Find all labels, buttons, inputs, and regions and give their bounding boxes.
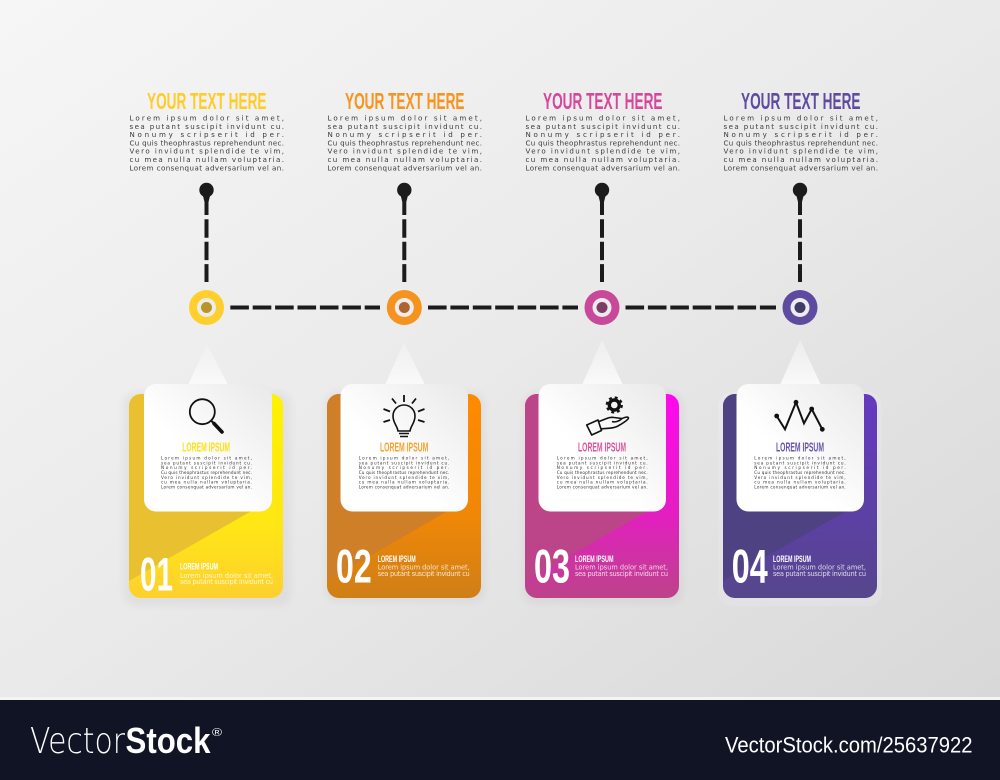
paragraph 4: Nonumy scripserit id per. [724, 130, 878, 139]
footer logo [30, 720, 222, 762]
paragraph 2: Nonumy scripserit id per. [328, 130, 482, 139]
paragraph 3: Vero invidunt splendide te vim, [526, 147, 680, 156]
paragraph 3: Lorem ipsum dolor sit amet, [526, 114, 680, 122]
paragraph 2: Lorem ipsum dolor sit amet, [328, 114, 482, 122]
pin 1 [199, 183, 214, 282]
paragraph 1: Lorem ipsum dolor sit amet, [130, 114, 284, 122]
paragraph 4: cu mea nulla nullam voluptaria. [724, 155, 878, 164]
box text 2: sea putant suscipit invidunt cu. [359, 460, 449, 465]
paragraph 2: sea putant suscipit invidunt cu. [328, 122, 482, 131]
box text 2: cu mea nulla nullam voluptaria. [359, 480, 449, 485]
paragraph 1: sea putant suscipit invidunt cu. [130, 122, 284, 131]
box text 2 [359, 456, 449, 490]
card caption 3 [575, 554, 668, 578]
box text 2: Lorem consenquat adversarium vel an. [359, 485, 449, 490]
box text 4: Lorem consenquat adversarium vel an. [754, 485, 846, 490]
paragraph 1: cu mea nulla nullam voluptaria. [130, 155, 284, 164]
footer logo: ® [212, 727, 222, 739]
paragraph 4: Cu quis theophrastus reprehendunt nec. [724, 138, 878, 147]
box text 4: Nonumy scripserit id per. [754, 465, 846, 470]
paragraph 3 [526, 114, 680, 172]
panel: card 2 [327, 361, 482, 598]
card caption 1: LOREM IPSUM [180, 562, 218, 573]
box text 3: Vero invidunt splendide te vim, [557, 475, 648, 480]
pin 3 [595, 183, 609, 282]
callout pointer 3 [582, 340, 623, 385]
paragraph 2: Cu quis theophrastus reprehendunt nec. [328, 138, 482, 147]
box label 1: LOREM IPSUM [182, 441, 230, 455]
paragraph 3: Cu quis theophrastus reprehendunt nec. [526, 138, 680, 147]
callout pointer 1 [188, 344, 228, 385]
panel: card 4 [718, 340, 882, 606]
box text 4: Vero invidunt splendide te vim, [754, 475, 846, 480]
paragraph 1: Vero invidunt splendide te vim, [130, 147, 284, 156]
heading 4: YOUR TEXT HERE [741, 88, 860, 114]
node 4 [782, 290, 818, 325]
paragraph 4: Lorem consenquat adversarium vel an. [724, 163, 878, 172]
box text 1: Nonumy scripserit id per. [161, 465, 252, 470]
card caption 4: sea putant suscipit invidunt cu [773, 570, 866, 578]
paragraph 3: Lorem consenquat adversarium vel an. [526, 163, 680, 172]
paragraph 1: Lorem consenquat adversarium vel an. [130, 163, 284, 172]
paragraph 4 [724, 114, 878, 172]
box text 1: cu mea nulla nullam voluptaria. [161, 480, 252, 485]
panel: card 1 [126, 368, 288, 602]
paragraph 1 [130, 114, 284, 172]
card caption 2: sea putant suscipit invidunt cu [378, 570, 470, 578]
white box 1 [144, 384, 272, 512]
icon: magnifier [190, 399, 222, 432]
paragraph 4: Lorem ipsum dolor sit amet, [724, 114, 878, 122]
column 1 header [130, 88, 284, 172]
white box 2 [340, 384, 468, 512]
box text 1: Lorem ipsum dolor sit amet, [161, 456, 252, 460]
box text 2: Nonumy scripserit id per. [359, 465, 449, 470]
card caption 4: Lorem ipsum dolor sit amet, [773, 564, 866, 572]
footer bar [0, 697, 1000, 780]
icon: line chart [774, 400, 825, 432]
heading 1: YOUR TEXT HERE [147, 88, 266, 114]
card caption 4 [773, 554, 866, 578]
paragraph 2 [328, 114, 482, 172]
box text 3: Lorem consenquat adversarium vel an. [557, 485, 648, 490]
pin 4 [793, 183, 807, 282]
card caption 2: LOREM IPSUM [378, 554, 416, 565]
box text 1: Lorem consenquat adversarium vel an. [161, 485, 252, 490]
white box 4 [736, 384, 864, 512]
box text 2: Cu quis theophrastus reprehendunt nec. [359, 470, 449, 475]
card caption 1: Lorem ipsum dolor sit amet, [180, 572, 273, 580]
card caption 2: Lorem ipsum dolor sit amet, [378, 564, 470, 572]
box text 2: Vero invidunt splendide te vim, [359, 475, 449, 480]
paragraph 3: Nonumy scripserit id per. [526, 130, 680, 139]
node 3 [584, 290, 620, 325]
box text 3: Lorem ipsum dolor sit amet, [557, 456, 648, 460]
box text 3 [557, 456, 648, 490]
box text 3: Cu quis theophrastus reprehendunt nec. [557, 470, 648, 475]
heading 2: YOUR TEXT HERE [345, 88, 464, 114]
column 2 header [328, 88, 482, 172]
box text 1: Vero invidunt splendide te vim, [161, 475, 252, 480]
paragraph 1: Nonumy scripserit id per. [130, 130, 284, 139]
box text 4: cu mea nulla nullam voluptaria. [754, 480, 846, 485]
callout pointer 2 [385, 342, 425, 385]
white box 3 [538, 384, 666, 512]
paragraph 2: Lorem consenquat adversarium vel an. [328, 163, 482, 172]
node 2 [387, 290, 422, 325]
box text 1 [161, 456, 252, 490]
paragraph 3: sea putant suscipit invidunt cu. [526, 122, 680, 131]
box label 2: LOREM IPSUM [380, 441, 428, 455]
timeline connector [230, 306, 776, 310]
card caption 2 [378, 554, 470, 578]
node 1 [189, 290, 224, 325]
box text 1: sea putant suscipit invidunt cu. [161, 460, 252, 465]
box text 4: sea putant suscipit invidunt cu. [754, 460, 846, 465]
box text 4: Cu quis theophrastus reprehendunt nec. [754, 470, 846, 475]
number 04: 04 [732, 540, 768, 593]
box text 4 [754, 456, 846, 490]
icon: light bulb [384, 395, 424, 436]
paragraph 2: cu mea nulla nullam voluptaria. [328, 155, 482, 164]
box label 3: LOREM IPSUM [578, 441, 626, 455]
number 02: 02 [336, 540, 372, 593]
footer id: VectorStock.com/25637922 [725, 732, 972, 758]
card caption 1 [180, 562, 273, 586]
box text 3: cu mea nulla nullam voluptaria. [557, 480, 648, 485]
paragraph 2: Vero invidunt splendide te vim, [328, 147, 482, 156]
icon: hand with gear [587, 397, 628, 435]
column 3 header [526, 88, 680, 172]
card caption 4: LOREM IPSUM [773, 554, 811, 565]
box text 2: Lorem ipsum dolor sit amet, [359, 456, 449, 460]
panel: card 3 [523, 340, 683, 604]
paragraph 3: cu mea nulla nullam voluptaria. [526, 155, 680, 164]
paragraph 4: Vero invidunt splendide te vim, [724, 147, 878, 156]
footer logo: Vector [30, 721, 125, 762]
number 03: 03 [534, 540, 570, 593]
box text 3: sea putant suscipit invidunt cu. [557, 460, 648, 465]
paragraph 1: Cu quis theophrastus reprehendunt nec. [130, 138, 284, 147]
callout pointer 4 [780, 340, 821, 385]
box text 4: Lorem ipsum dolor sit amet, [754, 456, 846, 460]
card caption 1: sea putant suscipit invidunt cu [180, 578, 273, 586]
pin 2 [397, 183, 411, 282]
heading 3: YOUR TEXT HERE [543, 88, 662, 114]
number 01: 01 [140, 548, 173, 601]
box label 4: LOREM IPSUM [776, 441, 824, 455]
paragraph 4: sea putant suscipit invidunt cu. [724, 122, 878, 131]
card caption 3: Lorem ipsum dolor sit amet, [575, 564, 668, 572]
column 4 header [724, 88, 878, 172]
card caption 3: sea putant suscipit invidunt cu [575, 570, 668, 578]
box text 1: Cu quis theophrastus reprehendunt nec. [161, 470, 252, 475]
box text 3: Nonumy scripserit id per. [557, 465, 648, 470]
footer logo: Stock [126, 720, 211, 761]
card caption 3: LOREM IPSUM [575, 554, 614, 565]
